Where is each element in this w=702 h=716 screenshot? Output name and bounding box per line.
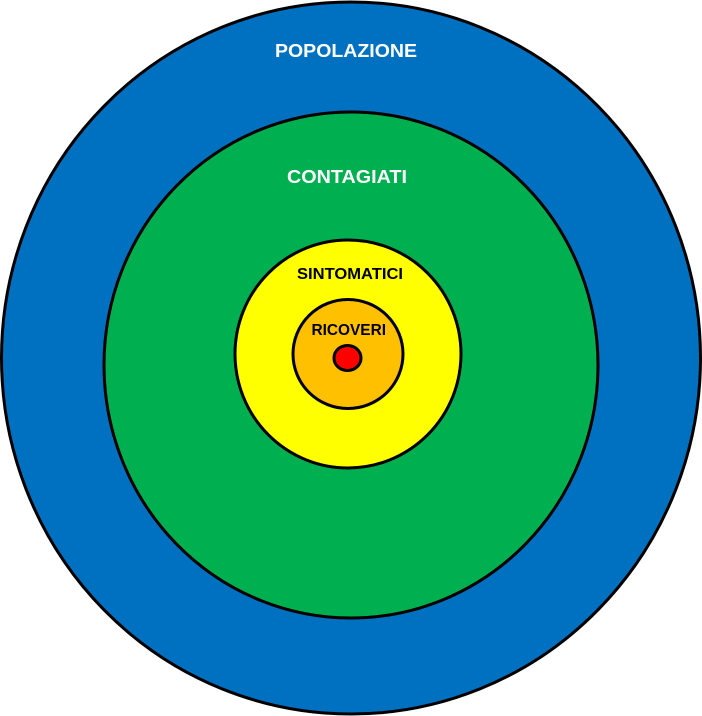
circle: ricoveri (293, 300, 403, 408)
circle: contagiati (104, 112, 598, 618)
circle: red core (334, 346, 361, 370)
label: popolazione: POPOLAZIONE (275, 40, 417, 61)
label: contagiati: CONTAGIATI (287, 166, 407, 187)
circle: sintomatici (235, 240, 461, 468)
label: sintomatici: SINTOMATICI (297, 266, 403, 283)
label: ricoveri: RICOVERI (312, 322, 386, 339)
